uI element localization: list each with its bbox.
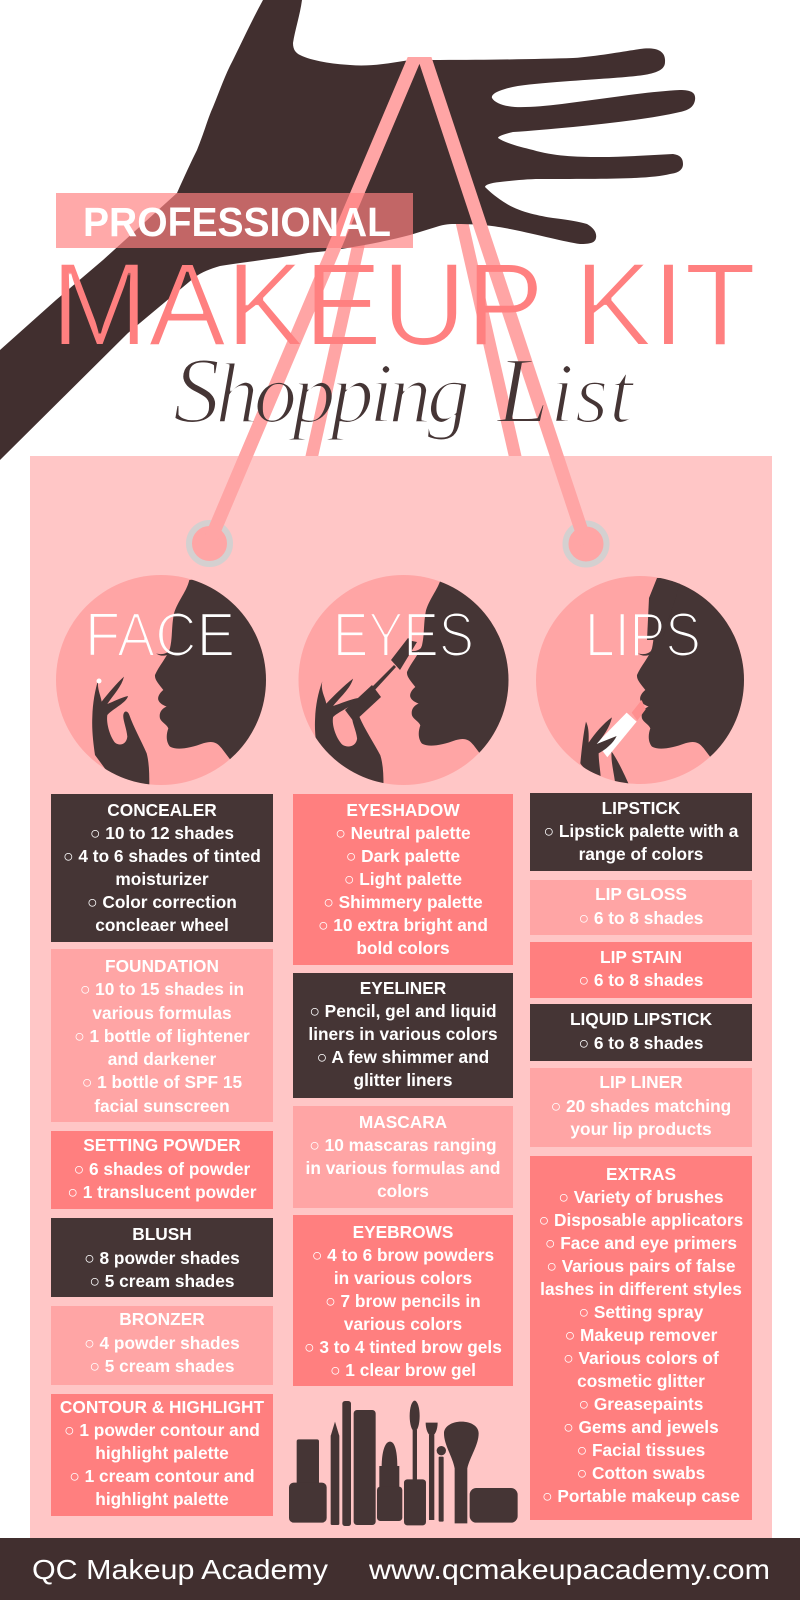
box: foundation: FOUNDATION [105,956,219,976]
box: concealer: moisturizer [115,869,209,889]
box: lip stain: ○ 6 to 8 shades [579,970,703,990]
box: lip liner: ○ 20 shades matching [551,1096,731,1116]
portrait: eyes [298,575,508,785]
cosmetics silhouette [289,1401,518,1526]
box: concealer: ○ 10 to 12 shades [90,823,234,843]
box: extras: ○ Facial tissues [577,1440,705,1460]
box: concealer: concleaer wheel [95,915,229,935]
box: eyeliner [293,973,513,1098]
portrait: eyes: EYES [333,601,474,670]
box: foundation: ○ 10 to 15 shades in [80,979,244,999]
box: foundation: ○ 1 bottle of lightener [74,1026,250,1046]
portrait: face: FACE [85,601,235,670]
portrait: lips [536,576,744,784]
box: eyebrows: ○ 4 to 6 brow powders [312,1245,494,1265]
box: bronzer: ○ 4 powder shades [84,1332,240,1352]
box: extras: ○ Various pairs of false [546,1256,736,1276]
box: eyeshadow: ○ Dark palette [346,846,460,866]
footer bar: www.qcmakeupacademy.com [368,1554,770,1585]
box: extras: EXTRAS [606,1164,676,1184]
box: extras: ○ Setting spray [579,1302,703,1322]
box: concealer: ○ 4 to 6 shades of tinted [63,846,261,866]
box: extras: ○ Variety of brushes [558,1187,724,1207]
title: makeup kit: MAKEUP KIT [51,239,756,371]
box: eyeshadow: ○ Neutral palette [335,823,471,843]
box: contour and highlight: CONTOUR & HIGHLIGHT [60,1397,264,1417]
subtitle: shopping list: Shopping [173,339,470,443]
box: lip liner: LIP LINER [599,1072,683,1092]
subtitle: shopping list [173,339,635,443]
box: eyeshadow: ○ Light palette [344,869,462,889]
box: mascara: colors [377,1181,429,1201]
bag ring: right [566,524,606,564]
box: extras [530,1156,752,1520]
box: blush: ○ 5 cream shades [90,1271,234,1291]
box: lip gloss: LIP GLOSS [595,884,687,904]
box: lipstick: LIPSTICK [602,798,680,818]
box: eyebrows: various colors [344,1314,462,1334]
box: bronzer [51,1306,273,1385]
box: setting powder: ○ 6 shades of powder [74,1158,250,1178]
box: foundation: and darkener [108,1049,216,1069]
box: eyeliner: ○ A few shimmer and [317,1047,489,1067]
footer bar: QC Makeup Academy [32,1554,328,1585]
box: liquid lipstick: LIQUID LIPSTICK [570,1009,712,1029]
shopping bag panel [30,456,772,1538]
box: bronzer: ○ 5 cream shades [90,1356,234,1376]
box: contour and highlight: highlight palette [95,1443,229,1463]
box: eyebrows: in various colors [334,1268,472,1288]
box: concealer [51,794,273,942]
portrait: lips: LIPS [585,601,701,670]
box: lip gloss: ○ 6 to 8 shades [579,908,703,928]
box: concealer: ○ Color correction [87,892,237,912]
box: eyebrows: EYEBROWS [353,1222,453,1242]
box: eyebrows: ○ 1 clear brow gel [330,1360,476,1380]
box: extras: cosmetic glitter [577,1371,705,1391]
box: lip gloss [530,880,752,935]
box: bronzer: BRONZER [119,1309,205,1329]
box: mascara: ○ 10 mascaras ranging [309,1135,497,1155]
box: extras: lashes in different styles [540,1279,742,1299]
box: contour and highlight: ○ 1 cream contour and [69,1466,255,1486]
box: lip liner: your lip products [570,1119,712,1139]
box: concealer: CONCEALER [107,800,217,820]
front bag straps [209,50,586,544]
box: eyebrows: ○ 3 to 4 tinted brow gels [304,1337,502,1357]
box: liquid lipstick [530,1004,752,1061]
box: eyeshadow [293,794,513,965]
heading label: professional: PROFESSIONAL [83,199,391,245]
box: lipstick: range of colors [579,844,703,864]
box: blush: BLUSH [132,1224,192,1244]
box: eyeliner: ○ Pencil, gel and liquid [309,1001,497,1021]
box: setting powder: ○ 1 translucent powder [67,1182,257,1202]
hand holding the bag [0,0,695,460]
box: eyebrows: ○ 7 brow pencils in [325,1291,481,1311]
bag ring: left [189,523,230,564]
box: extras: ○ Portable makeup case [542,1486,740,1506]
box: eyeliner: glitter liners [354,1070,452,1090]
box: extras: ○ Face and eye primers [545,1233,737,1253]
box: contour and highlight [51,1394,273,1516]
box: foundation: various formulas [92,1003,232,1023]
box: setting powder: SETTING POWDER [83,1135,241,1155]
box: extras: ○ Makeup remover [565,1325,717,1345]
box: mascara: MASCARA [359,1112,447,1132]
box: eyeshadow: EYESHADOW [346,800,460,820]
box: blush: ○ 8 powder shades [84,1248,240,1268]
box: extras: ○ Gems and jewels [563,1417,719,1437]
box: eyeshadow: ○ Shimmery palette [323,892,483,912]
box: lip stain [530,942,752,998]
box: eyeliner: EYELINER [360,978,446,998]
box: lip liner [530,1068,752,1147]
box: eyebrows [293,1215,513,1386]
box: eyeliner: liners in various colors [308,1024,498,1044]
box: contour and highlight: highlight palette [95,1489,229,1509]
box: contour and highlight: ○ 1 powder contour and [64,1420,260,1440]
box: extras: ○ Disposable applicators [539,1210,743,1230]
box: blush [51,1218,273,1297]
box: mascara [293,1106,513,1208]
box: extras: ○ Greasepaints [579,1394,703,1414]
box: foundation [51,949,273,1122]
box: extras: ○ Cotton swabs [577,1463,705,1483]
back bag straps [311,170,516,460]
box: mascara: in various formulas and [306,1158,500,1178]
box: eyeshadow: ○ 10 extra bright and [318,915,488,935]
box: lipstick: ○ Lipstick palette with a [544,821,738,841]
box: lipstick [530,793,752,871]
box: lip stain: LIP STAIN [600,947,682,967]
box: extras: ○ Various colors of [563,1348,719,1368]
portrait: face [56,575,266,785]
box: foundation: facial sunscreen [94,1096,230,1116]
subtitle: shopping list: List [495,339,635,443]
box: eyeshadow: bold colors [356,938,450,958]
footer bar [0,1538,800,1600]
box: foundation: ○ 1 bottle of SPF 15 [82,1072,242,1092]
box: liquid lipstick: ○ 6 to 8 shades [579,1032,703,1052]
box: setting powder [51,1131,273,1209]
